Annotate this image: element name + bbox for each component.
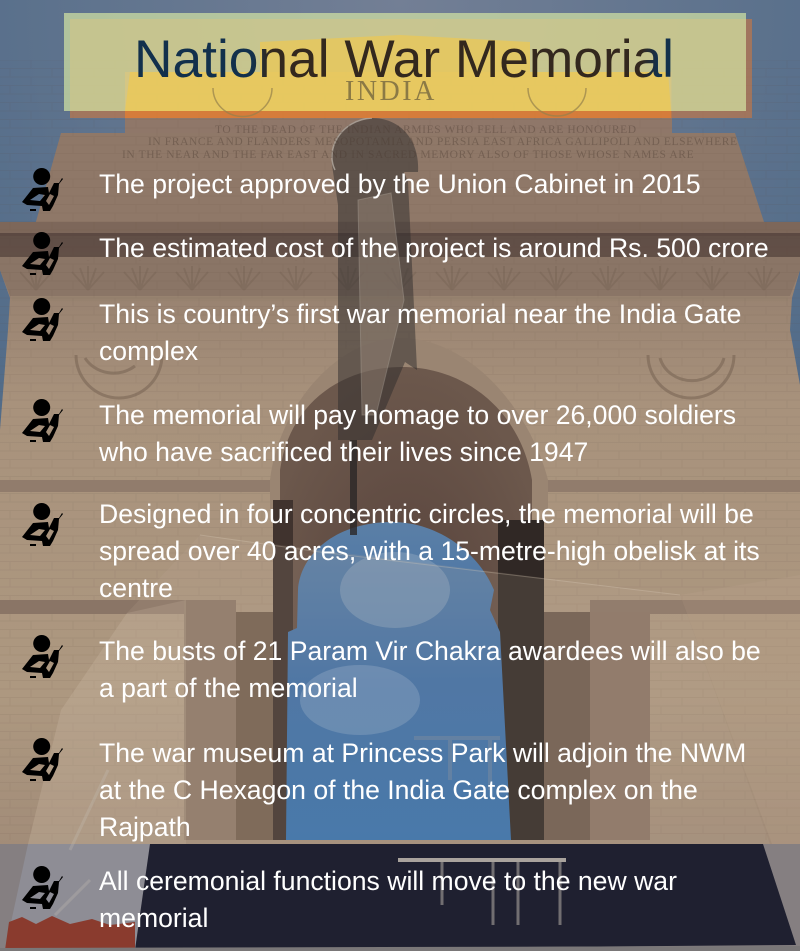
fact 5: Designed in four concentric circles, the memorial will be xyxy=(99,499,754,529)
icon: soldier 2 xyxy=(22,232,63,275)
wreath medallions xyxy=(76,355,734,398)
fact 8 xyxy=(99,866,677,933)
icon: soldier 1 xyxy=(22,168,63,211)
memorial stone overlay xyxy=(28,535,800,844)
icon: soldier 8 xyxy=(22,866,63,909)
fact 6: a part of the memorial xyxy=(99,673,358,703)
fact 2: The estimated cost of the project is around Rs. 500 crore xyxy=(99,233,769,263)
fact 6: The busts of 21 Param Vir Chakra awardees will also be xyxy=(99,636,761,666)
title: National War Memorial xyxy=(134,30,674,89)
arch opening xyxy=(184,338,650,840)
fact 8: All ceremonial functions will move to the new war xyxy=(99,866,677,896)
gate inscription: TO THE DEAD OF THE INDIAN ARMIES WHO FELL AND ARE HONOURED xyxy=(215,124,637,136)
fact 7: The war museum at Princess Park will adjoin the NWM xyxy=(99,738,746,768)
fact 3: This is country’s first war memorial near the India Gate xyxy=(99,299,741,329)
fact 4: who have sacrificed their lives since 1947 xyxy=(99,437,588,467)
title panel xyxy=(64,13,746,111)
gate inscription: IN THE NEAR AND THE FAR EAST AND IN SACRED MEMORY ALSO OF THOSE WHOSE NAMES ARE xyxy=(122,149,694,161)
icon: soldier 4 xyxy=(22,399,63,442)
icon: soldier 5 xyxy=(22,503,63,546)
icon: soldier 7 xyxy=(22,738,63,781)
fact 4 xyxy=(99,400,736,467)
fact 5: spread over 40 acres, with a 15-metre-high obelisk at its xyxy=(99,536,760,566)
memorial plinth base xyxy=(0,844,800,951)
icon: soldier 3 xyxy=(22,298,63,341)
fact 8: memorial xyxy=(99,903,208,933)
fact 7: Rajpath xyxy=(99,812,191,842)
fact 5 xyxy=(99,499,760,603)
fact 6 xyxy=(99,636,761,703)
fact 7 xyxy=(99,738,746,842)
fact 1: The project approved by the Union Cabinet in 2015 xyxy=(99,169,701,199)
gate inscription xyxy=(122,124,738,161)
gate name carved on attic: INDIA xyxy=(345,76,437,107)
fact 3: complex xyxy=(99,336,198,366)
fact 4: The memorial will pay homage to over 26,000 soldiers xyxy=(99,400,736,430)
gate inscription: IN FRANCE AND FLANDERS MESOPOTAMIA AND PERSIA EAST AFRICA GALLIPOLI AND ELSEWHERE xyxy=(148,136,738,148)
fact 5: centre xyxy=(99,573,173,603)
helmet and rifle silhouette xyxy=(332,118,418,535)
icon: soldier 6 xyxy=(22,635,63,678)
carved inscription on plinth xyxy=(55,738,566,925)
gate attic under the title panel shadow xyxy=(125,72,671,118)
fact 7: at the C Hexagon of the India Gate complex on the xyxy=(99,775,698,805)
fact 3 xyxy=(99,299,741,366)
title panel shadow xyxy=(70,19,752,118)
gate attic seen through the title panel xyxy=(125,35,671,118)
